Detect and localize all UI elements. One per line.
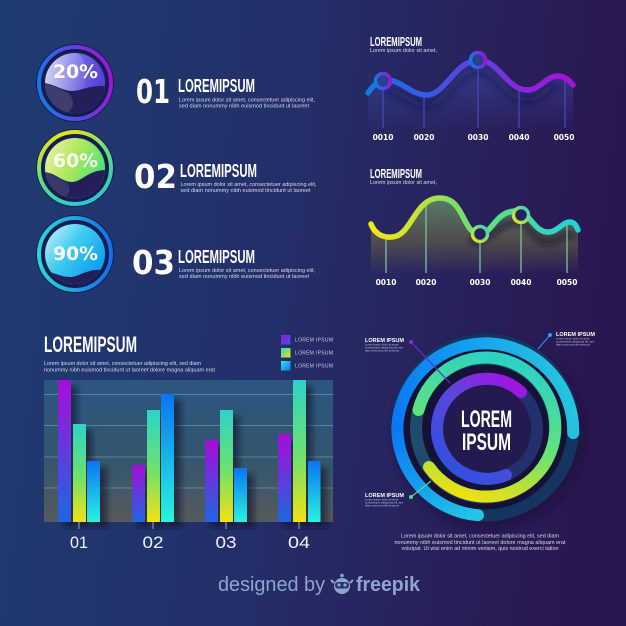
plot panel <box>44 380 333 522</box>
callout: bottom left: consectetuer adipiscing elit, sed <box>365 500 403 504</box>
center label: IPSUM <box>462 429 511 456</box>
item 02 <box>134 157 316 196</box>
callout: bottom left <box>365 481 431 508</box>
curve shadow <box>470 222 575 242</box>
drop lines <box>386 205 567 273</box>
middle arc <box>418 358 555 497</box>
markers <box>376 52 486 88</box>
legend: LOREM IPSUM <box>295 364 333 370</box>
item 03: 03 <box>132 243 175 282</box>
inner arc <box>437 379 521 479</box>
area <box>371 198 578 274</box>
description: nonummy nibh euismod tincidunt ut laoreet dolore magna aliquam erat <box>394 540 566 546</box>
callout: top right: Lorem ipsum dolor sit amet, <box>556 336 590 340</box>
icon: freepik mascot <box>331 574 353 594</box>
description: Lorem ipsum dolor sit amet, consectetuer adipiscing elit, sed diam <box>44 361 201 367</box>
item 03: LOREMIPSUM <box>178 247 255 267</box>
description: nonummy nibh euismod tincidunt ut laoreet dolore magna aliquam erat <box>44 368 216 374</box>
center label: LOREM <box>461 406 512 433</box>
description <box>394 534 566 552</box>
gauge 60% <box>36 129 114 207</box>
axis labels: 0040 <box>511 278 531 287</box>
item 01 <box>136 72 315 111</box>
axis labels: 0050 <box>554 133 574 142</box>
area <box>368 60 573 130</box>
axis labels: 0030 <box>470 278 490 287</box>
ticks <box>79 522 299 529</box>
heading: LOREMIPSUM <box>44 332 137 357</box>
item 01: sed diam nonummy nibh euismod tincidunt ut laoreet <box>179 104 310 110</box>
value: 60% <box>53 151 98 172</box>
description <box>44 361 216 374</box>
group 02 <box>132 394 174 522</box>
description: Lorem ipsum dolor sit amet, consectetuer adipiscing elit, sed diam <box>401 534 559 540</box>
callout: top right: diam nonummy nibh euismod <box>556 342 590 346</box>
item 02: Lorem ipsum dolor sit amet, consectetuer adipiscing elit, <box>180 182 316 188</box>
drop lines <box>383 66 565 128</box>
group 03 <box>205 410 247 522</box>
item 01: Lorem ipsum dolor sit amet, consectetuer adipiscing elit, <box>179 98 315 104</box>
ring tracks <box>397 340 573 516</box>
legend: LOREM IPSUM <box>295 338 333 344</box>
axis labels: 0030 <box>468 133 488 142</box>
panel: bar chart <box>44 332 333 552</box>
item 03 <box>132 243 315 282</box>
footer: freepik credit: freepik <box>356 573 421 596</box>
item 02: LOREMIPSUM <box>180 161 257 181</box>
line chart: top: Lorem ipsum dolor sit amet, <box>370 48 437 54</box>
callout: top left: LOREM IPSUM <box>365 338 404 344</box>
axis labels: 0050 <box>557 278 577 287</box>
gauge 90% <box>36 215 114 293</box>
description: volutpat. Ut wisi enim ad minim veniam, quis nostrud exerci tation <box>402 546 559 552</box>
axis labels: 0040 <box>509 133 529 142</box>
heading: LOREMIPSUM <box>370 167 422 181</box>
group 04 <box>278 380 320 522</box>
value: 90% <box>53 244 98 265</box>
legend <box>281 335 333 370</box>
legend: LOREM IPSUM <box>295 350 333 356</box>
axis labels: 02 <box>142 533 164 552</box>
line chart: bottom: Lorem ipsum dolor sit amet, <box>370 180 437 186</box>
ring shadow <box>396 340 584 528</box>
callout: top right: LOREM IPSUM <box>556 332 595 338</box>
axis labels: 0020 <box>414 133 434 142</box>
axis labels: 01 <box>70 533 88 552</box>
outer arc <box>397 343 573 515</box>
callout: top left: Lorem ipsum dolor sit amet, <box>365 342 399 346</box>
line chart: bottom <box>370 167 578 287</box>
callout: top left <box>365 338 450 383</box>
callout: bottom left: Lorem ipsum dolor sit amet, <box>365 498 399 502</box>
panel: radial chart <box>365 332 595 552</box>
panel: progress list <box>36 44 316 293</box>
callout: top left: diam nonummy nibh euismod <box>365 348 399 352</box>
footer: freepik credit <box>218 573 421 596</box>
footer: freepik credit: designed by <box>218 574 325 596</box>
group 01 <box>58 380 100 522</box>
callout: top left: consectetuer adipiscing elit, sed <box>365 346 403 350</box>
axis labels <box>376 278 577 287</box>
axis labels: 0010 <box>376 278 396 287</box>
axis labels: 0010 <box>373 133 393 142</box>
axis labels: 04 <box>288 533 310 552</box>
callout: bottom left: LOREM IPSUM <box>365 493 404 499</box>
line chart: top <box>368 35 574 142</box>
callout: bottom left: diam nonummy nibh euismod <box>365 504 399 508</box>
heading: LOREMIPSUM <box>370 35 422 49</box>
curve <box>371 198 578 237</box>
value: 20% <box>53 62 98 83</box>
axis labels <box>70 533 310 552</box>
axis labels <box>373 133 574 142</box>
item 01: 01 <box>136 72 170 111</box>
item 03: sed diam nonummy nibh euismod tincidunt ut laoreet <box>179 274 310 280</box>
center label <box>461 406 512 456</box>
callout: top right: consectetuer adipiscing elit, sed <box>556 340 594 344</box>
gauge 20% <box>36 44 114 122</box>
item 02: 02 <box>134 157 177 196</box>
markers <box>472 208 528 242</box>
callout: top right <box>538 332 595 349</box>
curve <box>368 60 573 95</box>
curve shadow <box>385 70 557 105</box>
item 03: Lorem ipsum dolor sit amet, consectetuer adipiscing elit, <box>179 268 315 274</box>
axis labels: 0020 <box>416 278 436 287</box>
bar shadows <box>64 386 327 528</box>
axis labels: 03 <box>216 533 236 552</box>
item 01: LOREMIPSUM <box>178 76 255 96</box>
item 02: sed diam nonummy nibh euismod tincidunt ut laoreet <box>180 188 311 194</box>
